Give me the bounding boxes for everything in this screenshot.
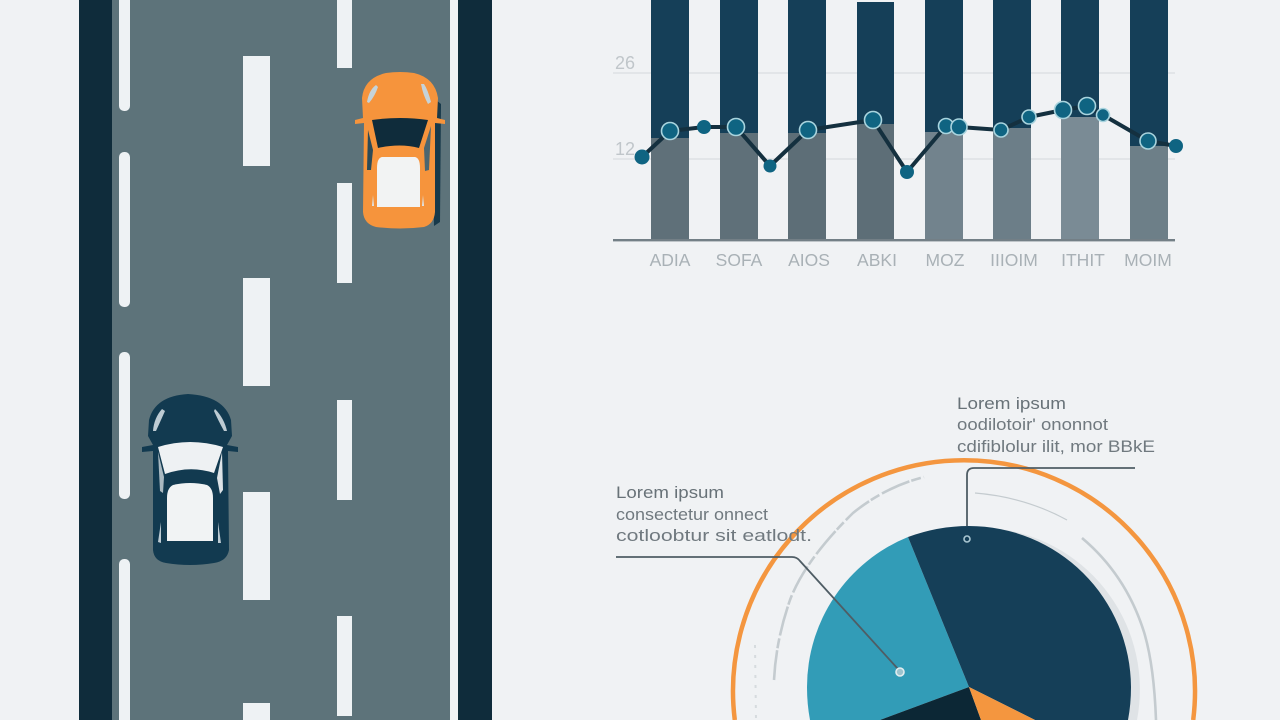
x axis labels — [650, 250, 1172, 270]
road — [79, 0, 492, 720]
trend line — [642, 106, 1176, 172]
callout: left: consectetur onnect — [616, 506, 768, 524]
pie chart — [733, 460, 1195, 720]
pie slice: navy — [908, 526, 1131, 720]
chart grid lines — [613, 73, 1175, 159]
pie shadow — [1000, 529, 1140, 720]
callout: top right: oodilotoir' ononnot — [957, 416, 1108, 434]
callout: top right: cdifiblolur ilit, mor BBkE — [957, 438, 1155, 456]
x axis labels: ADIA — [650, 250, 691, 270]
x axis labels: MOZ — [926, 250, 965, 270]
pie slice: black — [880, 687, 981, 720]
y axis labels: 12 — [615, 139, 635, 159]
lower grey bars — [651, 117, 1168, 240]
pie slice: orange — [969, 687, 1035, 720]
x axis labels: IIIOIM — [990, 250, 1038, 270]
pie slice: teal — [807, 537, 969, 720]
callout: left: cotloobtur sit eatlodt. — [616, 527, 812, 545]
y axis labels: 26 — [615, 53, 635, 73]
grey inner ring — [755, 477, 1156, 720]
upper navy bars — [651, 0, 1168, 148]
orange outer ring — [733, 460, 1195, 720]
callout: top right — [957, 395, 1155, 542]
icon: navy car — [142, 394, 238, 565]
y axis labels — [615, 53, 635, 159]
x axis — [613, 239, 1175, 241]
callout: left: Lorem ipsum — [616, 484, 724, 502]
x axis labels: SOFA — [716, 250, 763, 270]
x axis labels: AIOS — [788, 250, 830, 270]
callout: left — [616, 484, 904, 676]
icon: orange car — [355, 72, 445, 228]
x axis labels: MOIM — [1124, 250, 1172, 270]
bar and line chart — [613, 0, 1183, 270]
trend line points — [634, 98, 1183, 179]
x axis labels: ITHIT — [1061, 250, 1105, 270]
callout: top right: Lorem ipsum — [957, 395, 1066, 413]
x axis labels: ABKI — [857, 250, 897, 270]
